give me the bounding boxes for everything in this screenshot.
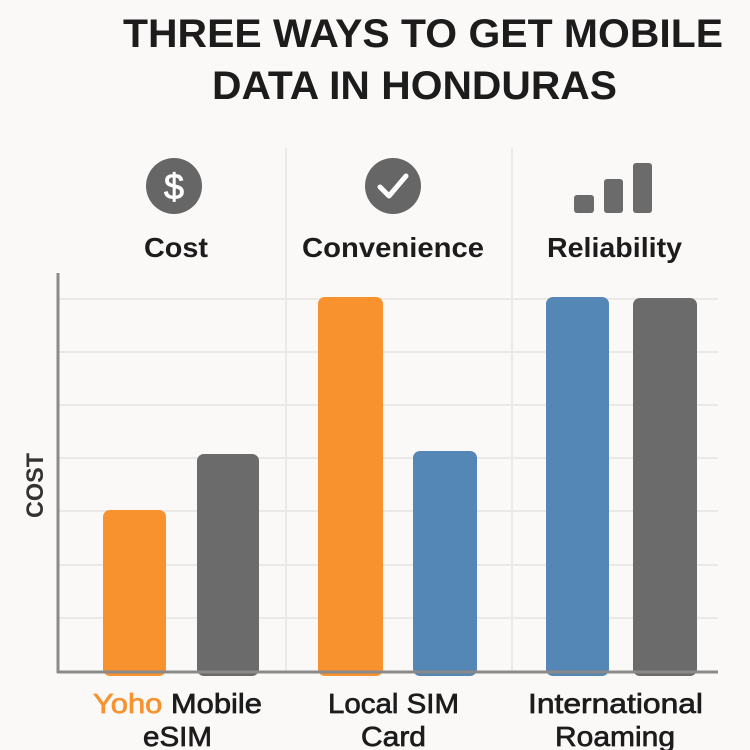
label: Local SIM Card: Local SIM xyxy=(328,688,459,719)
label: Local SIM Card xyxy=(328,688,459,750)
heading: Cost: Cost xyxy=(144,232,208,263)
title: THREE WAYS TO GET MOBILE xyxy=(123,12,723,56)
heading: Convenience: Convenience xyxy=(302,232,484,263)
y-axis label: COST xyxy=(22,453,49,518)
label: International Roaming xyxy=(528,688,703,750)
heading: Reliability: Reliability xyxy=(547,232,682,263)
label: Yoho Mobile eSIM xyxy=(93,688,262,750)
title: DATA IN HONDURAS xyxy=(212,64,617,108)
label: International Roaming: International xyxy=(528,688,703,719)
icon: check xyxy=(365,158,421,214)
label: Yoho Mobile eSIM: Yoho Mobile xyxy=(93,688,262,719)
title xyxy=(123,12,723,108)
icon: dollar: $ xyxy=(164,166,184,207)
axes xyxy=(57,273,718,673)
icon: signal bars xyxy=(574,163,652,213)
bar chart xyxy=(103,297,697,676)
icon: dollar xyxy=(146,158,202,214)
